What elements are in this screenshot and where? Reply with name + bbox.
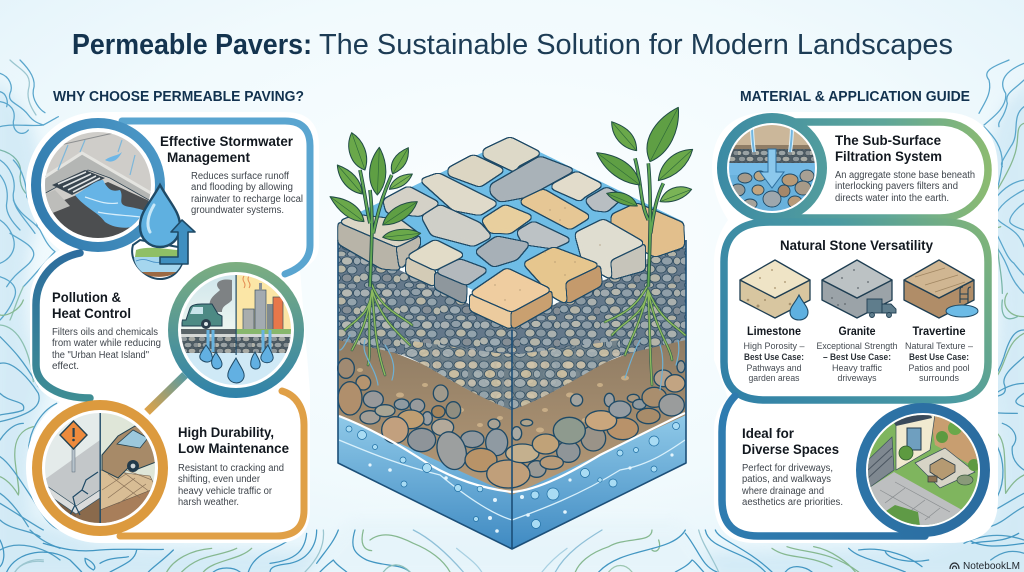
text: high durability, low maintenance: heavy vehicle traffic or [178,486,273,497]
panel: sub-surface filtration system [722,118,988,218]
panel: ideal for diverse spaces [722,396,985,536]
layer: paving surface [338,137,684,329]
text: pollution and heat control: effect. [52,361,79,372]
text: effective stormwater management [160,133,303,216]
text: travertine: Patios and pool [908,363,970,373]
panel: pollution and heat control [36,253,299,412]
icon: water drop [790,295,808,320]
text: ideal for diverse spaces: where drainage and [741,486,824,497]
text: granite: Granite [838,324,876,338]
text: pollution and heat control: from water while reducing [52,338,161,349]
icon: pollution and heat scene [180,275,292,388]
text: ideal for diverse spaces [741,425,843,508]
layer: water surface lines and bubbles [339,413,685,533]
panel: effective stormwater management [36,121,310,274]
text: ideal for diverse spaces: aesthetics are priorities. [742,497,843,508]
text: travertine: surrounds [919,373,959,383]
text: granite: Exceptional Strength [816,341,898,351]
stone: travertine [904,260,978,318]
bottom-left contours [0,530,482,572]
icon: water drop and recharge arrow [132,185,195,279]
text: high durability, low maintenance: High Durability, [178,424,274,440]
text: limestone: High Porosity – [744,341,804,351]
text: limestone [744,324,804,383]
text: travertine: Best Use Case: [909,352,969,362]
text: effective stormwater management: Effective Stormwater [160,133,294,149]
heading: Natural Stone Versatility [780,237,933,253]
text: effective stormwater management: Reduces surface runoff [191,171,289,182]
text: sub-surface filtration system: directs water into the earth. [835,193,949,204]
text: sub-surface filtration system: interlocking pavers filters and [835,181,958,192]
panel: natural stone versatility [724,222,988,400]
text: high durability, low maintenance: Low Maintenance [178,440,289,456]
text: limestone: Pathways and [746,363,802,373]
panel: left column backing [26,112,319,543]
layer: soil flecks [357,368,663,432]
text: ideal for diverse spaces: Diverse Spaces [742,441,839,457]
text: ideal for diverse spaces: patios, and walkways [742,474,831,485]
text: pollution and heat control: Filters oils and chemicals [52,327,158,338]
text: limestone: garden areas [748,373,800,383]
text: sub-surface filtration system: Filtration System [835,148,942,164]
layer: large river stones [338,358,685,488]
text: limestone: Limestone [747,324,801,338]
icon: cracked concrete vs pavers [44,412,156,525]
text: travertine [905,324,973,383]
stone: granite [822,260,896,318]
right lower contours [964,300,1024,560]
layer: gravel [338,240,512,410]
text: granite: – Best Use Case: [823,352,891,362]
layer: soil [338,330,686,495]
text: high durability, low maintenance: shifting, even under [178,474,261,485]
icon: landscape with driveway and patio [868,415,978,525]
text: pollution and heat control: Pollution & [52,289,121,305]
right upper contours [974,60,1024,317]
text: pollution and heat control: the "Urban Heat Island" [52,350,149,361]
left upper contours [0,60,58,320]
text: effective stormwater management: and flooding by allowing [191,182,293,193]
logo: NotebookLM: NotebookLM [963,561,1020,572]
text: travertine: Natural Texture – [905,341,973,351]
text: effective stormwater management: Management [167,149,250,165]
central cross-section of permeable paving [330,107,693,549]
heading: material and application guide: MATERIAL & APPLICATION GUIDE [740,89,970,105]
text: granite [816,324,898,383]
text: high durability, low maintenance: harsh weather. [178,497,239,508]
paver speckle [494,199,601,301]
text: sub-surface filtration system: The Sub-Surface [835,132,941,148]
panel: high durability, low maintenance [37,391,304,536]
text: sub-surface filtration system: An aggregate stone base beneath [835,170,975,181]
text: limestone: Best Use Case: [744,352,804,362]
text: pollution and heat control [52,289,161,372]
bottom-right contours [542,530,1024,572]
icon: truck [867,299,896,318]
icon: pool ladder [946,287,978,317]
text: granite: Heavy traffic [832,363,882,373]
text: sub-surface filtration system [835,132,975,204]
connector: orange link [147,375,185,412]
layer: face outlines [338,240,686,549]
text: effective stormwater management: groundwater systems. [191,205,284,216]
text: ideal for diverse spaces: Ideal for [742,425,795,441]
icon: storm drain scene [45,132,151,238]
text: effective stormwater management: rainwater to recharge local [191,194,303,205]
left lower contours [0,300,60,572]
title: The Sustainable Solution for Modern Landscapes [319,29,953,61]
text: high durability, low maintenance: Resistant to cracking and [178,463,284,474]
panel: right column backing [712,112,998,543]
text: high durability, low maintenance [178,424,289,508]
stone: limestone [740,260,810,320]
layer: water table [338,395,686,549]
icon: filtration cross-section [729,125,815,211]
text: pollution and heat control: Heat Control [52,305,131,321]
heading: why choose permeable paving: WHY CHOOSE PERMEABLE PAVING? [53,89,304,105]
text: travertine: Travertine [912,324,966,338]
plant: left with roots [330,133,421,385]
plant: right with roots [597,107,693,390]
text: granite: driveways [838,373,877,383]
title: Permeable Pavers: [72,29,312,61]
text: ideal for diverse spaces: Perfect for driveways, [742,463,833,474]
